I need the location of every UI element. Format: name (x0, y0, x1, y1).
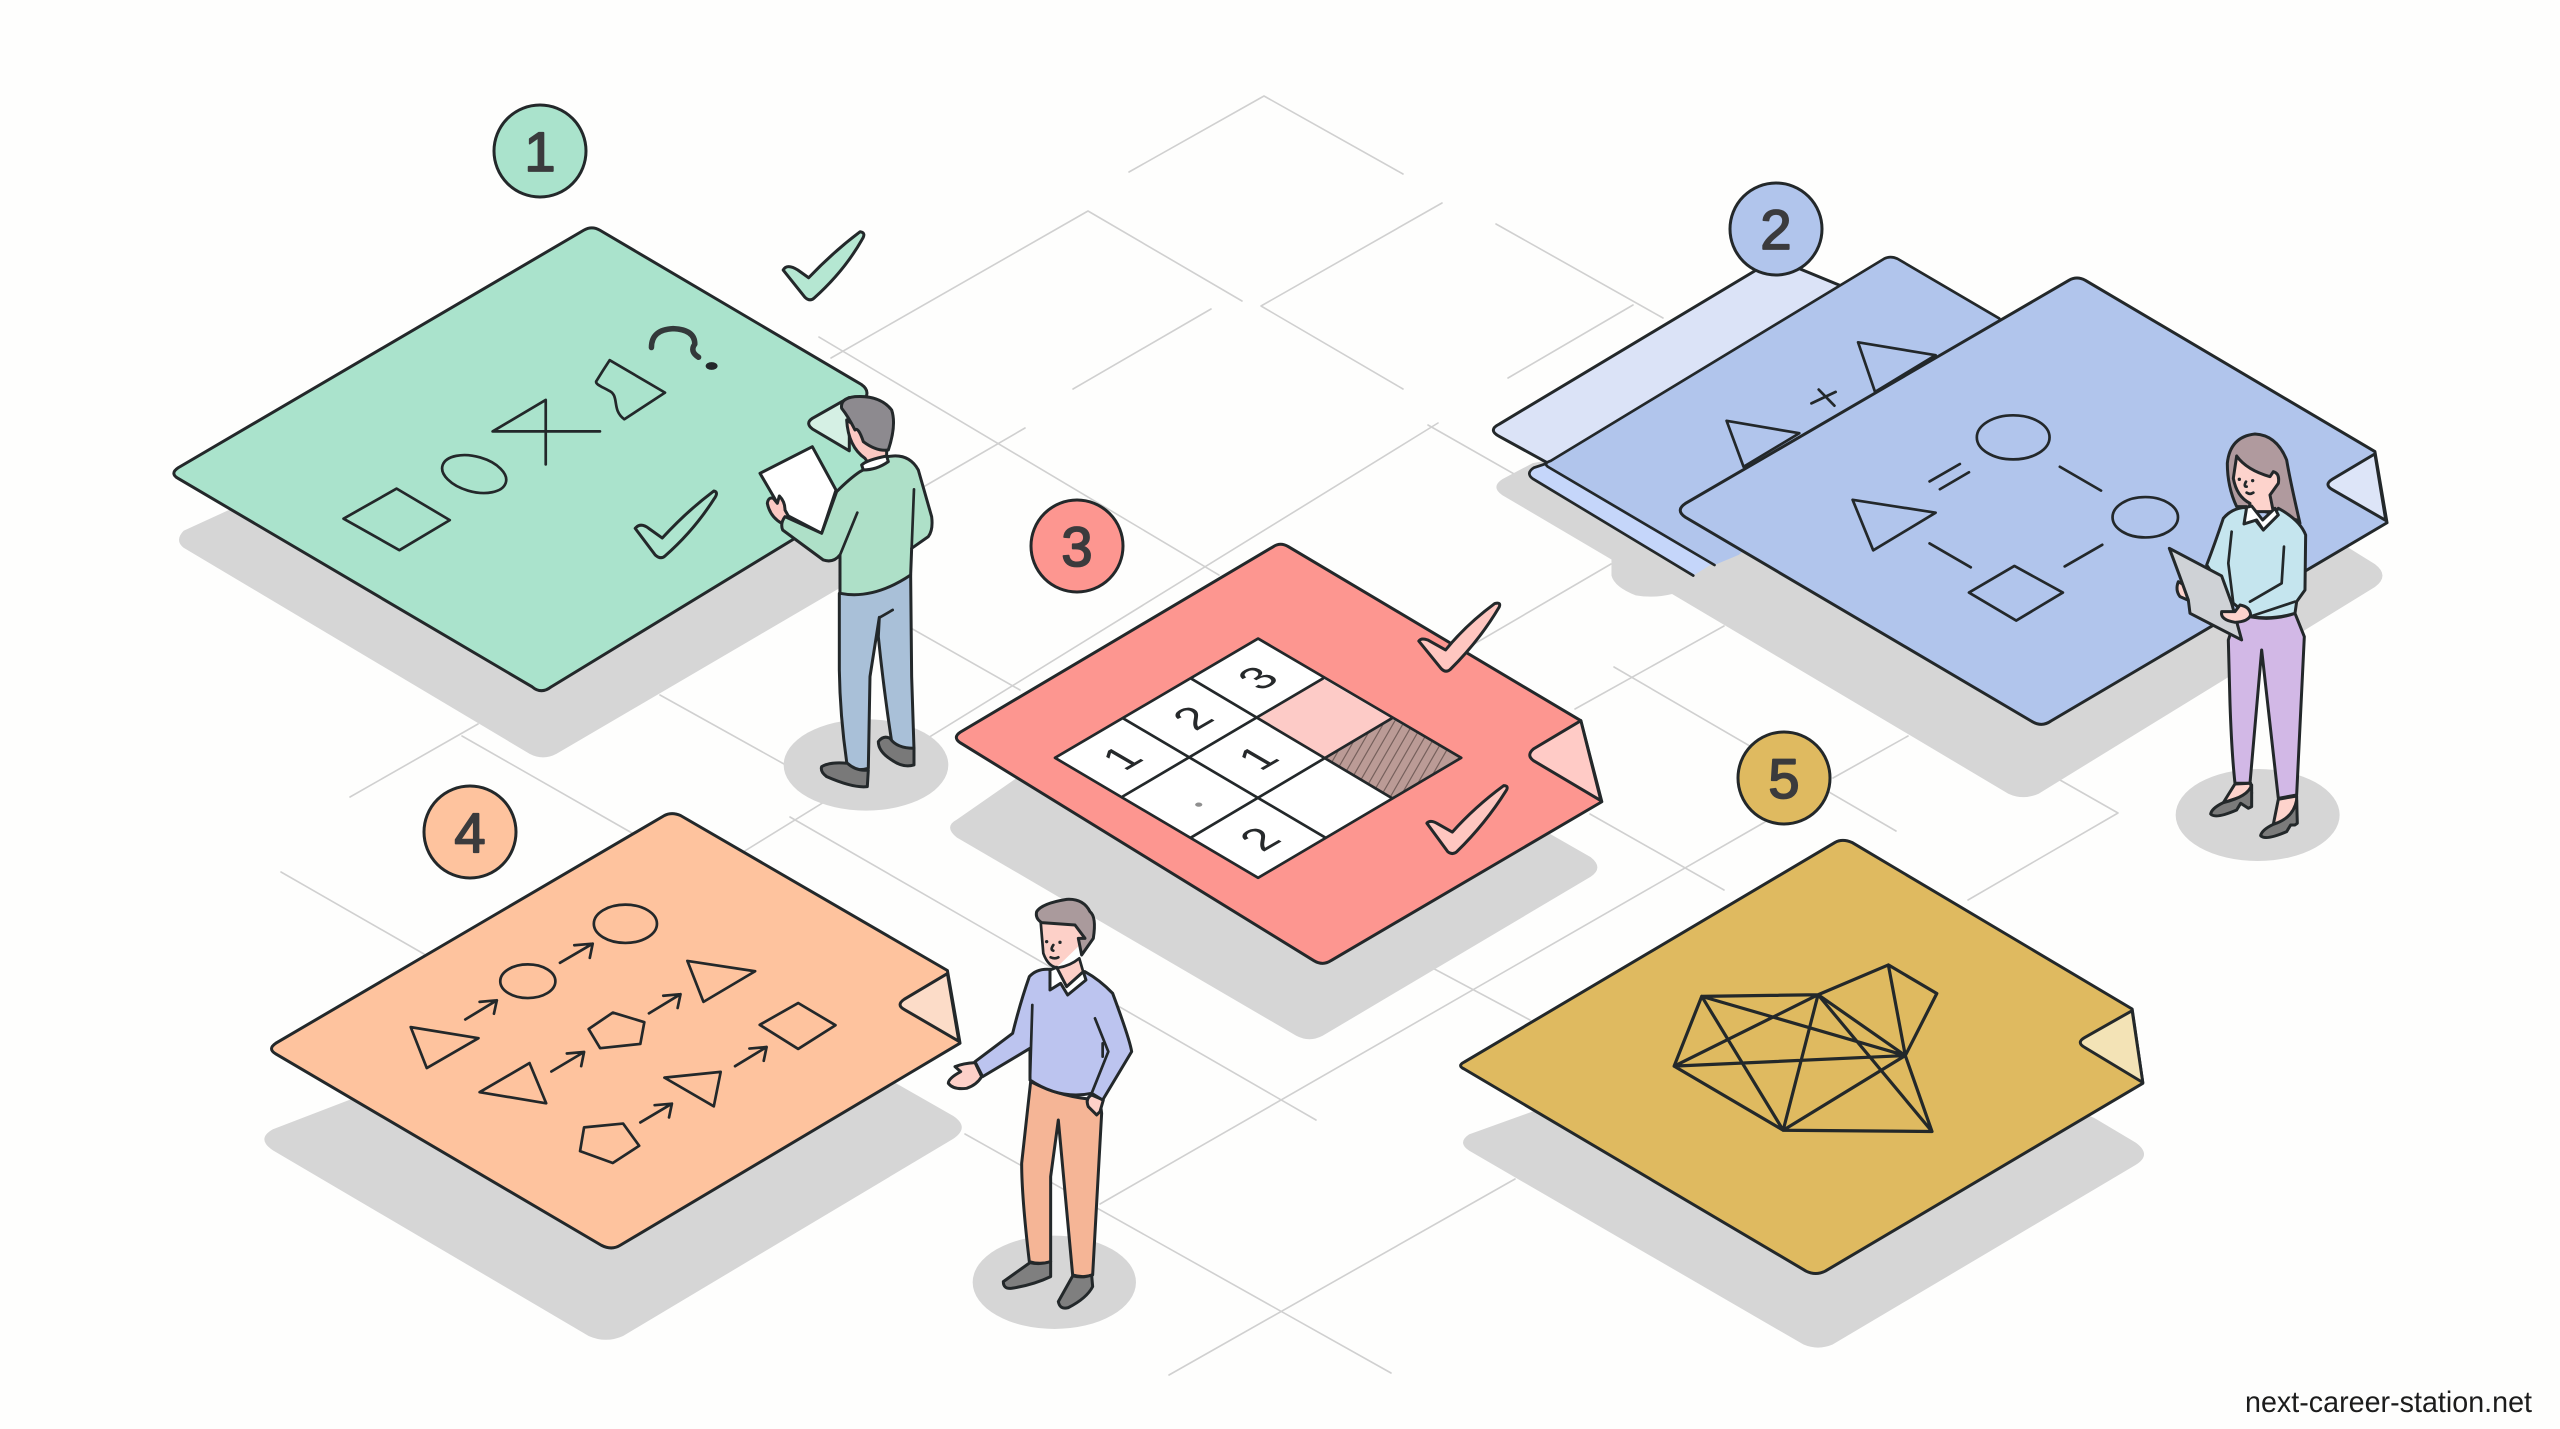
panel 3: red sheet with number grid: 1 (1227, 740, 1290, 777)
panel 3: red sheet with number grid: 1 (1091, 740, 1154, 777)
person 2: man in lavender sweater gesturing (948, 899, 1136, 1329)
panel 4: orange sheet with shape sequences (264, 814, 962, 1340)
panel 3: red sheet with number grid: 3 (1227, 660, 1290, 697)
step badge 4: 4 (454, 801, 486, 864)
panel 3: red sheet with number grid: 2 (1162, 700, 1225, 737)
step badge 2: 2 (1760, 198, 1792, 261)
step badge 3 (1031, 500, 1123, 592)
step badge 3: 3 (1061, 515, 1093, 578)
step badge 4 (424, 786, 516, 878)
panel 3: red sheet with number grid: 2 (1229, 821, 1292, 858)
panel 2: stacked blue sheets with shapes (1493, 257, 2387, 797)
step badge 1 (494, 105, 586, 197)
panel 3: red sheet with number grid (950, 544, 1602, 1039)
step badge 1: 1 (524, 120, 556, 183)
panel 5: gold sheet with network diagram (1461, 840, 2144, 1348)
person 1: man in green sweater holding paper (760, 396, 948, 811)
step badge 2 (1730, 183, 1822, 275)
person 3: woman with long hair holding tablet (2169, 434, 2340, 861)
footer website credit: next-career-station.net (2245, 1386, 2533, 1419)
step badge 5 (1738, 732, 1830, 824)
panel 1: green sheet with shapes (174, 228, 871, 757)
step badge 5: 5 (1768, 747, 1800, 810)
